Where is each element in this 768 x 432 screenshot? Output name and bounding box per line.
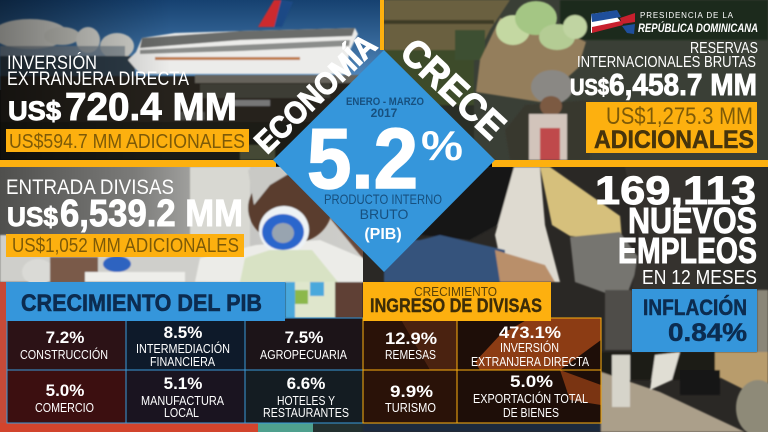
- cell: agropecuaria: [260, 328, 348, 362]
- callout: 1,275.3 MM adicionales: ADICIONALES: [594, 126, 754, 154]
- table background: [7, 318, 363, 423]
- callout: inflacion: INFLACIÓN: [643, 295, 747, 320]
- label: entrada divisas: ENTRADA DIVISAS: [6, 176, 174, 199]
- panel: entrada divisas: [6, 176, 244, 257]
- cell: hoteles y restaurantes: HOTELES Y: [277, 394, 336, 408]
- panel: nuevos empleos: 169,113: [595, 169, 756, 213]
- cell: inversion extranjera directa: INVERSIÓN: [500, 340, 559, 355]
- cell: turismo: TURISMO: [385, 401, 436, 415]
- cell: exportacion total de bienes: 5.0%: [510, 372, 553, 391]
- cell: manufactura local: 5.1%: [164, 374, 202, 393]
- callout: 1,275.3 MM adicionales: [586, 102, 757, 154]
- diamond shape: [273, 50, 495, 272]
- value: 5.2%: %: [421, 122, 463, 169]
- period: enero - marzo 2017: 2017: [371, 106, 398, 120]
- cell: agropecuaria: 7.5%: [285, 328, 323, 347]
- cell: manufactura local: [141, 374, 225, 420]
- label: reservas: [577, 40, 758, 71]
- cell: inversion extranjera directa: EXTRANJERA DIRECTA: [471, 355, 590, 369]
- photo: factory worker with mask: [0, 167, 384, 318]
- cell: intermediacion financiera: FINANCIERA: [150, 355, 216, 369]
- cell: construccion: CONSTRUCCIÓN: [20, 347, 108, 362]
- cell: agropecuaria: AGROPECUARIA: [260, 348, 348, 362]
- photo: farmer carrying cabbages: [384, 0, 768, 160]
- cell: intermediacion financiera: INTERMEDIACIÓN: [136, 341, 230, 356]
- heading: ingreso de divisas: CRECIMIENTO: [414, 284, 497, 299]
- panel: crecimiento ingreso de divisas table: [363, 282, 601, 423]
- cell: exportacion total de bienes: EXPORTACIÓN TOTAL: [473, 391, 588, 406]
- cell: hoteles y restaurantes: RESTAURANTES: [263, 406, 349, 420]
- callout: 1,052 MM adicionales: US$1,052 MM ADICIONALES: [12, 235, 239, 257]
- label: inversion: [7, 52, 189, 90]
- period: enero - marzo 2017: [346, 96, 424, 120]
- cell: construccion: 7.2%: [46, 328, 84, 347]
- period: enero - marzo 2017: ENERO - MARZO: [346, 96, 424, 108]
- cell: turismo: 9.9%: [390, 382, 433, 401]
- photo: red peppers on conveyor: [0, 282, 363, 432]
- label: producto interno bruto: [324, 191, 442, 243]
- cell: remesas: 12.9%: [385, 329, 437, 348]
- cell: manufactura local: LOCAL: [164, 406, 199, 420]
- callout: inflacion: [632, 289, 757, 352]
- value: 6,539.2 MM: US$: [7, 202, 58, 232]
- callout: inflacion: 0.84%: [668, 319, 747, 347]
- cell: remesas: REMESAS: [385, 348, 436, 362]
- yellow divider bars: [0, 0, 768, 167]
- title: crece: CRECE: [392, 31, 513, 148]
- cell: intermediacion financiera: [136, 323, 230, 369]
- panel: nuevos empleos: [595, 169, 757, 289]
- panel: crecimiento del PIB table: [6, 282, 363, 423]
- heading: crecimiento del PIB: CRECIMIENTO DEL PIB: [21, 290, 262, 317]
- heading: ingreso de divisas: [363, 282, 551, 321]
- value: 6,458.7 MM: 6,458.7 MM: [609, 67, 757, 102]
- panel: central diamond PIB: [273, 50, 495, 272]
- value: 720.4 MM: US$: [8, 96, 61, 126]
- cell: intermediacion financiera: 8.5%: [164, 323, 202, 342]
- label: producto interno bruto: BRUTO: [360, 206, 408, 222]
- panel: inversion extranjera directa: [6, 52, 249, 153]
- label: inversion: EXTRANJERA DIRECTA: [7, 69, 189, 90]
- cell: comercio: [35, 381, 94, 415]
- logo: presidencia de la republica dominicana: [591, 10, 758, 35]
- value: 720.4 MM: 720.4 MM: [65, 86, 237, 129]
- cell: comercio: 5.0%: [46, 381, 84, 400]
- title: economia: ECONOMÍA: [248, 27, 383, 160]
- label: producto interno bruto: (PIB): [364, 226, 402, 243]
- cell: comercio: COMERCIO: [35, 401, 94, 415]
- cell: remesas: [385, 329, 437, 362]
- cell: hoteles y restaurantes: 6.6%: [287, 374, 325, 393]
- icon: flag: [591, 10, 635, 34]
- cell: exportacion total de bienes: DE BIENES: [503, 406, 559, 420]
- callout: 594.7 MM adicionales: US$594.7 MM ADICIONALES: [9, 131, 245, 153]
- label: inversion: INVERSIÓN: [7, 52, 97, 74]
- value: 5.2%: 5.2: [307, 112, 418, 207]
- cell: hoteles y restaurantes: [263, 374, 349, 420]
- heading: ingreso de divisas: INGRESO DE DIVISAS: [370, 296, 542, 317]
- value: 6,458.7 MM: US$: [570, 74, 609, 100]
- panel: reservas internacionales brutas: [570, 40, 758, 154]
- cell: inversion extranjera directa: 473.1%: [499, 323, 561, 342]
- cell: construccion: [20, 328, 108, 362]
- cell: inversion extranjera directa: [471, 323, 590, 369]
- logo: presidencia de la republica dominicana: PRESIDENCIA DE LA: [640, 11, 734, 20]
- heading: crecimiento del PIB: [6, 282, 285, 321]
- cell: exportacion total de bienes: [473, 372, 588, 420]
- cell: turismo: [385, 382, 436, 415]
- table background: [363, 318, 601, 423]
- photo: man at sewing machine: [363, 167, 768, 432]
- photo: cruise ship at dock: [0, 0, 384, 160]
- cell: manufactura local: MANUFACTURA: [141, 394, 225, 408]
- value: 6,539.2 MM: 6,539.2 MM: [60, 193, 243, 235]
- label: producto interno bruto: PRODUCTO INTERNO: [324, 191, 442, 207]
